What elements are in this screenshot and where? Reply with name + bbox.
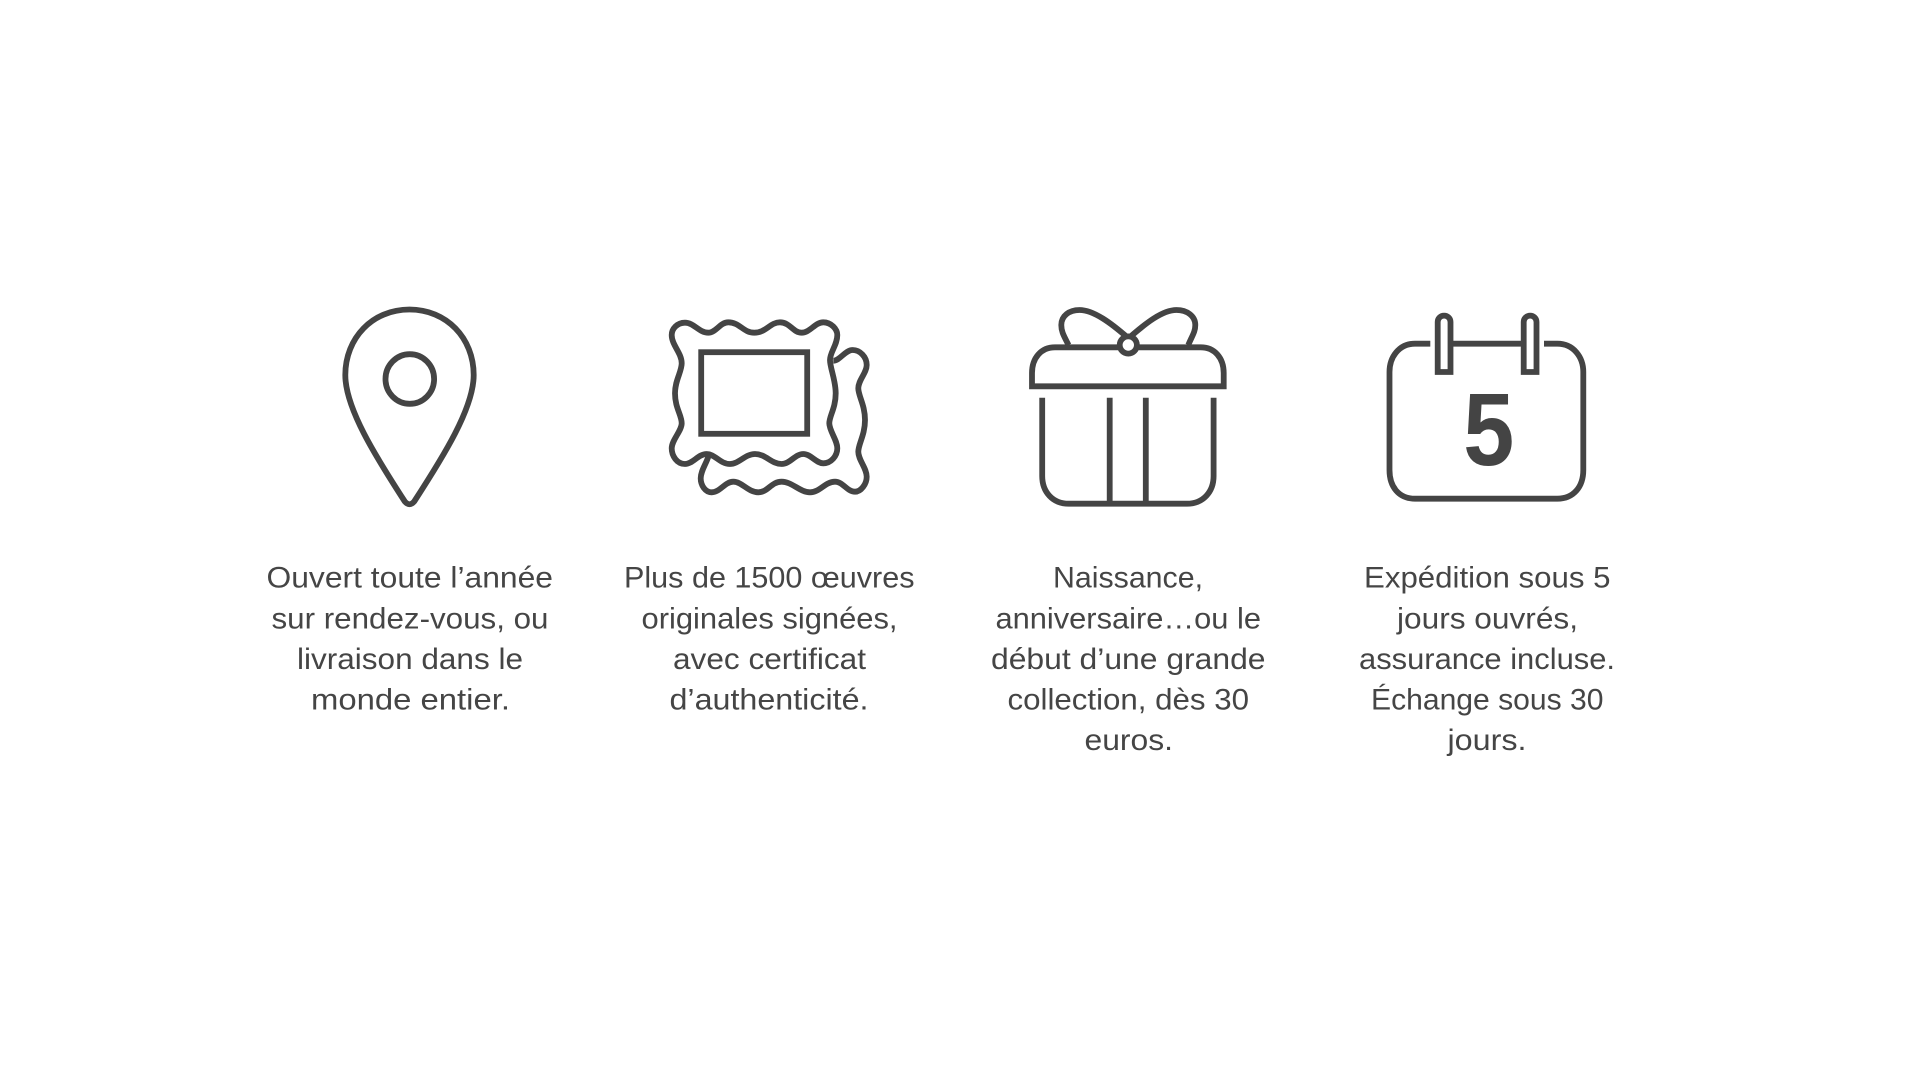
text: delivery description: Échange sous 30 <box>1371 684 1604 716</box>
text: location description <box>266 563 553 716</box>
text: delivery description: assurance incluse. <box>1359 644 1615 676</box>
text: location description: monde entier. <box>311 684 510 716</box>
text: gift description: Naissance, <box>1053 563 1203 595</box>
text: delivery description: jours. <box>1446 725 1526 757</box>
panel: artworks <box>624 322 914 716</box>
text: gift description: euros. <box>1084 725 1173 757</box>
text: gift description <box>991 563 1266 757</box>
text: location description: livraison dans le <box>297 644 523 676</box>
text: delivery description <box>1359 563 1615 757</box>
icon: calendar: 5 <box>1463 372 1514 487</box>
text: artworks description <box>624 563 914 716</box>
text: gift description: début d’une grande <box>991 644 1266 676</box>
text: artworks description: d’authenticité. <box>670 684 868 716</box>
text: location description: sur rendez-vous, ou <box>272 603 548 635</box>
panel: gift <box>991 310 1266 757</box>
text: artworks description: avec certificat <box>673 644 866 676</box>
text: artworks description: originales signées, <box>642 603 898 635</box>
panel: delivery <box>1359 316 1615 757</box>
text: gift description: collection, dès 30 <box>1008 684 1249 716</box>
icon: map pin <box>345 310 474 504</box>
icon: picture frame <box>672 322 867 492</box>
icon: gift box <box>1032 310 1224 504</box>
text: delivery description: Expédition sous 5 <box>1364 563 1610 595</box>
text: gift description: anniversaire…ou le <box>996 603 1261 635</box>
icon: calendar <box>1390 316 1583 499</box>
text: delivery description: jours ouvrés, <box>1396 603 1578 635</box>
text: location description: Ouvert toute l’année <box>266 563 553 595</box>
text: artworks description: Plus de 1500 œuvres <box>624 563 914 595</box>
panel: location <box>266 310 553 716</box>
